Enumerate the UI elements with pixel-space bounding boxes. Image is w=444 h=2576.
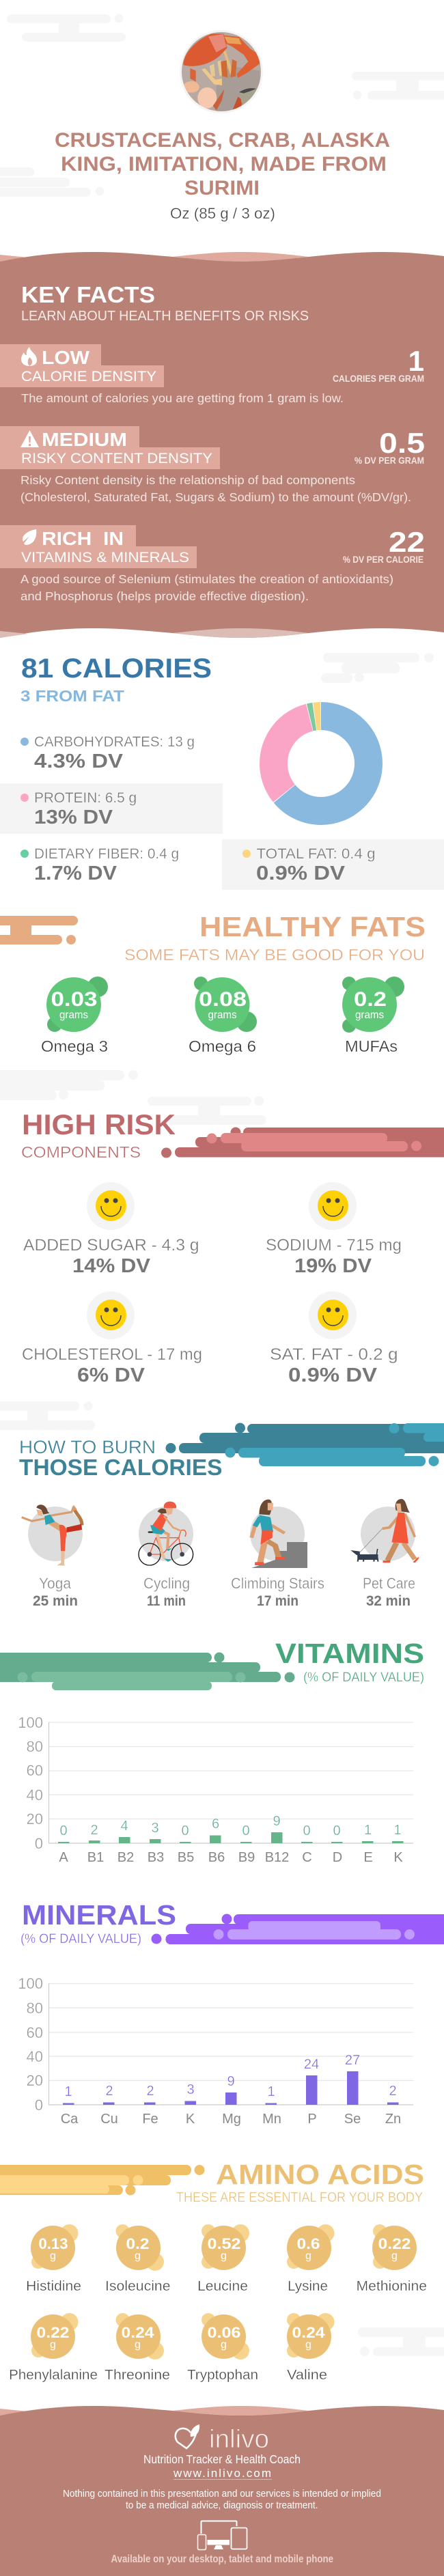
bar chart: vitamins: 2	[90, 1823, 98, 1838]
fat: mufas	[342, 977, 404, 1055]
bar chart: minerals: 80	[27, 2000, 43, 2017]
amino: histidine	[26, 2224, 81, 2294]
fat: omega 6: 0.08	[199, 988, 247, 1011]
activity durations	[33, 1593, 411, 1609]
bar chart: minerals: 2	[146, 2084, 154, 2099]
bar chart: minerals: Ca	[61, 2112, 79, 2127]
bar chart: vitamins: K	[393, 1850, 403, 1865]
decoration: yellow bars	[0, 2165, 205, 2195]
legend: carbohydrates: 4.3% DV	[34, 751, 124, 772]
amino: methionine: 0.22	[378, 2235, 411, 2252]
subheading: amino acids: THESE ARE ESSENTIAL FOR YOUR BODY	[176, 2190, 423, 2205]
bar chart: vitamins: 60	[27, 1762, 43, 1779]
risk: sodium: SODIUM - 715 mg	[266, 1236, 402, 1255]
amino: isoleucine: 0.2	[126, 2235, 149, 2252]
fact: calorie density: The amount of calories you are getting from 1 gram is low.	[21, 391, 344, 405]
fat: omega 3	[41, 977, 108, 1055]
fact: rich in vitamins and minerals: 22	[389, 526, 425, 558]
amino: threonine: 0.24	[122, 2324, 154, 2341]
bar chart: minerals: 40	[27, 2048, 43, 2065]
bar chart: vitamins	[18, 1714, 413, 1865]
heading: healthy fats: HEALTHY FATS	[199, 911, 426, 942]
bar chart: vitamins: B9	[238, 1850, 255, 1865]
bar chart: minerals: Mn	[262, 2112, 281, 2127]
fat: omega 6: Omega 6	[189, 1037, 256, 1055]
bar chart: minerals: 60	[27, 2024, 43, 2041]
fact: rich in vitamins and minerals: A good source of Selenium (stimulates the creation of antioxidants)	[20, 572, 393, 586]
logo: inlivo: inlivo	[209, 2425, 269, 2454]
amino: lysine: 0.6	[296, 2235, 320, 2252]
amino: methionine: Methionine	[357, 2279, 427, 2294]
risk: saturated fat	[270, 1291, 398, 1386]
activity labels: Pet Care	[363, 1575, 415, 1592]
amino: isoleucine: g	[135, 2250, 141, 2262]
bar chart: minerals: K	[186, 2112, 195, 2127]
fact: calorie density: LOW	[42, 347, 90, 368]
bar chart: minerals: 3	[186, 2082, 195, 2097]
amino: valine: g	[305, 2339, 311, 2351]
fact: calorie density	[0, 344, 424, 405]
bar chart: vitamins: 0	[35, 1835, 43, 1852]
food header	[55, 29, 390, 222]
decoration: red bars	[161, 1127, 444, 1158]
fat: omega 3: 0.03	[51, 988, 97, 1011]
food title: SURIMI	[184, 177, 260, 199]
amino: histidine: Histidine	[26, 2279, 81, 2294]
bar chart: vitamins: 40	[27, 1787, 43, 1804]
legend: protein: 13% DV	[34, 807, 113, 828]
bar chart: vitamins: B6	[208, 1850, 225, 1865]
risk: saturated fat: SAT. FAT - 0.2 g	[270, 1345, 398, 1364]
panel: key facts	[0, 252, 444, 649]
legend: protein: PROTEIN: 6.5 g	[34, 790, 137, 806]
bar chart: vitamins: 0	[181, 1823, 189, 1838]
amino: lysine: g	[305, 2250, 311, 2262]
food title: CRUSTACEANS, CRAB, ALASKA	[55, 129, 390, 152]
legend: dietary fiber	[20, 846, 179, 884]
decoration: teal bars	[165, 1423, 444, 1466]
fat: omega 3: grams	[59, 1009, 88, 1021]
bar chart: minerals: 2	[105, 2084, 113, 2099]
fat: omega 3: Omega 3	[41, 1037, 108, 1055]
bar chart: vitamins: 100	[18, 1714, 43, 1731]
risk: sodium: 19% DV	[294, 1255, 372, 1277]
icon: leaf	[23, 529, 36, 545]
amino: leucine: Leucine	[197, 2279, 248, 2294]
fact: rich in vitamins and minerals: % DV PER CALORIE	[343, 555, 424, 565]
bar chart: minerals: 20	[27, 2072, 43, 2089]
tagline: Nutrition Tracker & Health Coach	[143, 2452, 301, 2466]
fat: mufas: 0.2	[354, 988, 387, 1011]
activity durations: 32 min	[366, 1593, 411, 1609]
bar chart: minerals: 24	[304, 2057, 319, 2072]
bar chart: vitamins: 20	[27, 1810, 43, 1828]
subheading: from fat: 3 FROM FAT	[20, 687, 124, 705]
bar chart: minerals: Se	[344, 2112, 361, 2127]
subheading: key facts: LEARN ABOUT HEALTH BENEFITS OR RISKS	[21, 309, 309, 324]
activity durations: 25 min	[33, 1593, 78, 1609]
legend: total fat	[222, 839, 444, 890]
bar chart: vitamins: 80	[27, 1738, 43, 1755]
fat: omega 6: grams	[208, 1009, 236, 1021]
amino: threonine: g	[135, 2339, 141, 2351]
legend: carbohydrates: CARBOHYDRATES: 13 g	[34, 734, 195, 750]
bar chart: minerals: 9	[227, 2074, 235, 2089]
risk: added sugar: ADDED SUGAR - 4.3 g	[23, 1236, 199, 1255]
amino: phenylalanine	[9, 2313, 98, 2383]
fact: rich in vitamins and minerals: and Phosphorus (helps provide effective digestion).	[20, 589, 309, 603]
bar chart: minerals: 100	[18, 1975, 43, 1992]
activity durations: 17 min	[257, 1593, 299, 1609]
decoration: green bars	[0, 1653, 295, 1690]
activity: yoga	[22, 1504, 83, 1565]
fact: risky content density: Risky Content density is the relationship of bad components	[20, 473, 355, 487]
amino: phenylalanine: Phenylalanine	[9, 2368, 98, 2383]
amino: isoleucine: Isoleucine	[105, 2279, 171, 2294]
decoration: purple bars	[152, 1914, 444, 1944]
disclaimer	[63, 2488, 381, 2511]
heading: minerals: MINERALS	[22, 1899, 176, 1931]
bar chart: vitamins: 1	[393, 1823, 402, 1838]
heading: high risk: HIGH RISK	[22, 1108, 176, 1140]
disclaimer: to be a medical advice, diagnosis or treatment.	[126, 2500, 318, 2511]
availability note: Available on your desktop, tablet and mobile phone	[111, 2553, 333, 2565]
amino: histidine: g	[50, 2250, 56, 2262]
subheading: components: COMPONENTS	[21, 1143, 141, 1161]
panel: high risk	[21, 1108, 444, 1386]
panel: footer	[0, 2406, 444, 2576]
bar chart: minerals: Fe	[142, 2112, 158, 2127]
heading: key facts: KEY FACTS	[21, 282, 155, 307]
risk: sodium	[266, 1182, 402, 1277]
activity labels: Yoga	[39, 1575, 72, 1592]
heading: those calories: THOSE CALORIES	[19, 1455, 223, 1480]
legend: total fat: 0.9% DV	[256, 863, 346, 884]
amino: methionine: g	[391, 2250, 398, 2262]
amino: lysine: Lysine	[288, 2279, 328, 2294]
activity labels: Climbing Stairs	[231, 1575, 324, 1592]
fact: risky content density	[0, 426, 425, 504]
bar chart: vitamins: 9	[273, 1814, 281, 1829]
bar chart: vitamins: 0	[333, 1823, 341, 1838]
legend: dietary fiber: DIETARY FIBER: 0.4 g	[34, 846, 179, 862]
amino: tryptophan	[187, 2313, 258, 2383]
amino: tryptophan: 0.06	[208, 2324, 240, 2341]
bar chart: minerals: Zn	[385, 2112, 401, 2127]
legend: total fat: TOTAL FAT: 0.4 g	[257, 846, 376, 862]
legend: dietary fiber: 1.7% DV	[34, 863, 117, 884]
amino: valine: Valine	[287, 2368, 327, 2383]
activity: cycling	[139, 1502, 193, 1565]
fact: risky content density: % DV PER GRAM	[355, 456, 424, 466]
bar chart: minerals: Mg	[222, 2112, 241, 2127]
activity labels	[39, 1575, 415, 1592]
heading: amino acids: AMINO ACIDS	[216, 2159, 424, 2190]
fact: calorie density: CALORIE DENSITY	[21, 369, 156, 384]
food title	[55, 129, 390, 199]
panel: amino acids	[0, 2159, 427, 2383]
bar chart: vitamins: B12	[265, 1850, 289, 1865]
amino: isoleucine	[105, 2224, 171, 2294]
amino: histidine: 0.13	[38, 2235, 68, 2252]
bar chart: vitamins: 0	[59, 1823, 68, 1838]
fat: mufas: MUFAs	[345, 1037, 398, 1055]
website link: www.inlivo.com	[173, 2467, 271, 2480]
fact: risky content density: RISKY CONTENT DENSITY	[21, 451, 212, 466]
amino: threonine: Threonine	[105, 2368, 170, 2383]
bar chart: vitamins: B2	[117, 1850, 134, 1865]
panel: how to burn those calories	[19, 1423, 444, 1609]
subheading: healthy fats: SOME FATS MAY BE GOOD FOR YOU	[124, 946, 425, 964]
fact: calorie density: CALORIES PER GRAM	[333, 374, 424, 384]
bar chart: vitamins: 0	[242, 1823, 250, 1838]
fact: risky content density: 0.5	[379, 427, 425, 459]
bar chart: minerals: P	[307, 2112, 317, 2127]
amino: phenylalanine: 0.22	[37, 2324, 70, 2341]
amino: leucine: 0.52	[208, 2235, 240, 2252]
amino: valine	[287, 2313, 335, 2383]
fat: mufas: grams	[355, 1009, 384, 1021]
activity labels: Cycling	[143, 1575, 190, 1592]
bar chart: minerals: 1	[267, 2084, 275, 2099]
amino: leucine: g	[221, 2250, 227, 2262]
bar chart: vitamins: B5	[178, 1850, 194, 1865]
legend: protein	[0, 783, 223, 834]
fact: risky content density: MEDIUM	[42, 429, 127, 450]
risk: saturated fat: 0.9% DV	[288, 1364, 378, 1386]
legend: carbohydrates	[20, 734, 195, 772]
risk: added sugar	[23, 1182, 199, 1277]
amino: lysine	[287, 2224, 335, 2294]
amino: methionine	[357, 2224, 427, 2294]
bar chart: minerals: 0	[35, 2097, 43, 2114]
bar chart: vitamins: E	[363, 1850, 373, 1865]
activity durations: 11 min	[147, 1593, 186, 1609]
bar chart: vitamins: 3	[151, 1821, 159, 1836]
risk: cholesterol: CHOLESTEROL - 17 mg	[22, 1345, 202, 1364]
risk: added sugar: 14% DV	[72, 1255, 151, 1277]
fact: rich in vitamins and minerals: RICH IN	[42, 528, 124, 549]
fact: rich in vitamins and minerals	[0, 525, 425, 603]
risk: cholesterol	[22, 1291, 202, 1386]
bar chart: minerals: 2	[389, 2084, 397, 2099]
bar chart: minerals	[18, 1975, 413, 2127]
bar chart: minerals: 27	[345, 2053, 360, 2068]
bar chart: vitamins: 1	[364, 1823, 372, 1838]
bar chart: vitamins: B1	[87, 1850, 104, 1865]
activity: pet care	[350, 1499, 419, 1563]
bar chart: minerals: 1	[64, 2084, 72, 2099]
serving size: Oz (85 g / 3 oz)	[170, 205, 275, 222]
heading: 81 calories: 81 CALORIES	[21, 654, 212, 684]
fat: omega 6	[189, 977, 257, 1055]
heading: vitamins: VITAMINS	[275, 1638, 424, 1669]
fact: risky content density: (Cholesterol, Saturated Fat, Sugars & Sodium) to the amount (%DV/gr).	[20, 490, 411, 504]
amino: tryptophan: Tryptophan	[187, 2368, 258, 2383]
subheading: vitamins: (% OF DAILY VALUE)	[303, 1670, 424, 1685]
panel: calories	[0, 654, 444, 890]
amino: leucine	[197, 2224, 249, 2294]
bar chart: vitamins: 6	[212, 1817, 219, 1832]
amino: tryptophan: g	[221, 2339, 227, 2351]
amino: valine: 0.24	[292, 2324, 325, 2341]
bar chart: vitamins: B3	[148, 1850, 164, 1865]
bar chart: minerals: Cu	[100, 2112, 118, 2127]
amino: threonine	[105, 2313, 170, 2383]
icon: devices	[198, 2521, 247, 2550]
food title: KING, IMITATION, MADE FROM	[61, 153, 387, 176]
disclaimer: Nothing contained in this presentation and our services is intended or implied	[63, 2488, 381, 2500]
amino: phenylalanine: g	[50, 2339, 56, 2351]
food photo	[180, 29, 264, 114]
bar chart: vitamins: C	[302, 1850, 312, 1865]
activity: climbing stairs	[250, 1500, 307, 1568]
bar chart: vitamins: A	[59, 1850, 68, 1865]
bar chart: vitamins: 4	[120, 1819, 128, 1834]
icon: warning triangle	[20, 430, 39, 447]
decoration: orange bars	[0, 916, 78, 944]
bar chart: vitamins: D	[333, 1850, 342, 1865]
panel: minerals	[18, 1899, 444, 2127]
fact: rich in vitamins and minerals: VITAMINS & MINERALS	[21, 550, 189, 565]
heading: how to burn: HOW TO BURN	[19, 1437, 156, 1457]
fact: calorie density: 1	[408, 345, 424, 377]
panel: vitamins	[0, 1638, 424, 1865]
risk: cholesterol: 6% DV	[77, 1364, 145, 1386]
bar chart: vitamins: 0	[303, 1823, 311, 1838]
subheading: minerals: (% OF DAILY VALUE)	[20, 1931, 141, 1946]
icon: flame	[21, 347, 37, 366]
donut chart	[273, 716, 369, 811]
logo: inlivo	[176, 2424, 269, 2454]
panel: healthy fats	[0, 911, 426, 1055]
